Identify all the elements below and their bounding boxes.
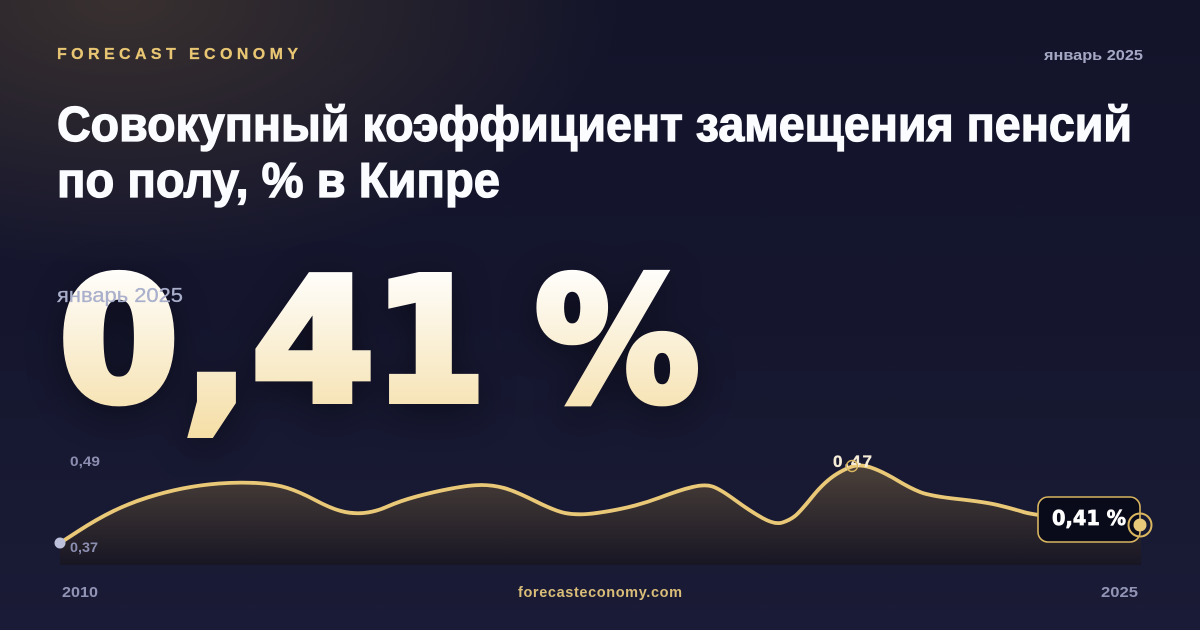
big value: 0 (59, 243, 178, 441)
end point marker (1128, 514, 1152, 536)
axis max label: 0,49 (70, 454, 100, 469)
big value: , (183, 246, 250, 451)
title (57, 98, 1132, 208)
end year: 2025 (1101, 585, 1138, 601)
title: по полу, % в Кипре (57, 154, 500, 208)
big value (59, 242, 699, 451)
date top right: январь 2025 (1044, 47, 1143, 64)
peak annotation: 0,47 (833, 452, 872, 471)
brand label: FORECAST ECONOMY (57, 46, 298, 63)
big value: 1 (374, 243, 486, 441)
current value callout (1038, 497, 1140, 542)
big value: % (535, 243, 699, 441)
start year: 2010 (62, 585, 98, 601)
title: Совокупный коэффициент замещения пенсий (57, 98, 1132, 152)
date under title: январь 2025 (57, 285, 183, 307)
start point (54, 538, 66, 548)
sparkline chart (54, 465, 1141, 565)
axis min label: 0,37 (70, 540, 98, 555)
big value: 4 (252, 242, 375, 440)
current value callout: 0,41 % (1052, 506, 1126, 530)
website: forecasteconomy.com (518, 585, 682, 601)
chart line (60, 465, 1088, 543)
chart area fill (60, 465, 1141, 565)
